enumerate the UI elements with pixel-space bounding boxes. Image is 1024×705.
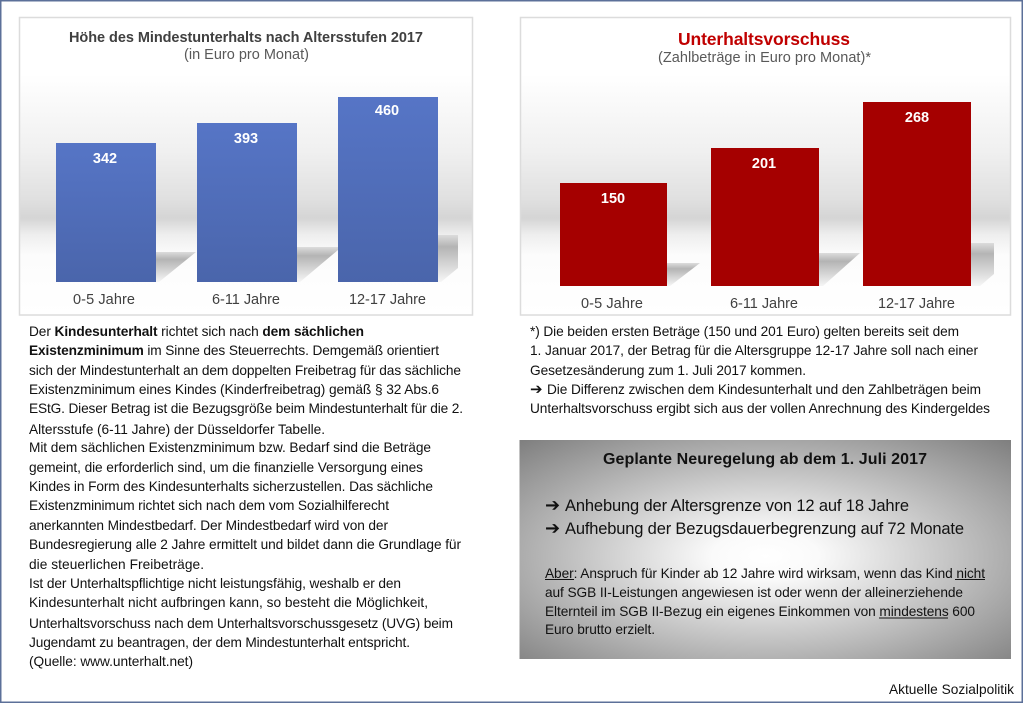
bar: 12-17 Jahre 268: [863, 102, 971, 286]
text block: Kindesunterhalt explanation: anerkannten Mindestbedarf. Der Mindestbedarf wird von der: [29, 518, 388, 533]
text block: Kindesunterhalt explanation: Mit dem sächlichen Existenzminimum bzw. Bedarf sind die Beträge: [29, 440, 431, 455]
text block: footnote: 1. Januar 2017, der Betrag für die Altersgruppe 12-17 Jahre soll nach einer: [530, 343, 978, 358]
axis labels: 6-11 Jahre: [212, 292, 280, 308]
chart subtitle: (Zahlbeträge in Euro pro Monat)*: [658, 50, 871, 66]
bar shadows: [156, 235, 458, 282]
chart title: Unterhaltsvorschuss: [678, 29, 850, 49]
axis labels: [73, 292, 426, 308]
text block: Kindesunterhalt explanation: Jugendamt zu beantragen, der dem Mindestunterhalt entspricht.: [29, 635, 410, 650]
chart title: Höhe des Mindestunterhalts nach Altersstufen 2017: [69, 30, 423, 46]
text block: Kindesunterhalt explanation: die steuerlichen Freibeträge.: [29, 557, 204, 572]
text block: Kindesunterhalt explanation: Ist der Unterhaltspflichtige nicht leistungsfähig, weshalb er den: [29, 576, 401, 591]
bar: 6-11 Jahre 201: 201: [752, 156, 776, 172]
chart background: [20, 18, 472, 315]
bar: 0-5 Jahre 342: 342: [93, 151, 117, 167]
text block: Kindesunterhalt explanation: Bundesregierung alle 2 Jahre ermittelt und bildet dann die Grundlage für: [29, 537, 461, 552]
text block: Kindesunterhalt explanation: EStG. Dieser Betrag ist die Bezugsgröße beim Mindestunterhalt für die 2.: [29, 401, 463, 416]
text block: Kindesunterhalt explanation: Unterhaltsvorschuss nach dem Unterhaltsvorschussgesetz (UVG) beim: [29, 616, 453, 631]
axis labels: 0-5 Jahre: [73, 292, 135, 308]
bar shadows: [667, 243, 994, 286]
text block: condition: Euro brutto erzielt.: [545, 622, 655, 637]
arrow: footnote: ➔: [530, 380, 543, 398]
text block: Kindesunterhalt explanation: gemeint, die erforderlich sind, um die finanzielle Versorgung eines: [29, 460, 423, 475]
panel: Unterhaltsvorschuss chart: [520, 18, 1010, 315]
axis labels: 0-5 Jahre: [581, 296, 643, 312]
text block: condition: auf SGB II-Leistungen angewiesen ist oder wenn der alleinerziehende: [545, 585, 963, 600]
bar: 12-17 Jahre 460: [338, 97, 438, 282]
text block: footnote: Unterhaltsvorschuss ergibt sich aus der vollen Anrechnung des Kindergeldes: [530, 401, 990, 416]
bar: 12-17 Jahre 268: 268: [905, 110, 929, 126]
item: Bezugsdauer: Aufhebung der Bezugsdauerbegrenzung auf 72 Monate: [565, 520, 964, 538]
panel background: [520, 440, 1011, 659]
text block: Kindesunterhalt explanation: Kindes in Form des Kindesunterhalts sicherzustellen. Das sächliche: [29, 479, 433, 494]
bar: 12-17 Jahre 460: 460: [375, 103, 399, 119]
arrow: second item: ➔: [545, 518, 560, 539]
bar: 6-11 Jahre 201: [711, 148, 819, 286]
item: Altersgrenze: Anhebung der Altersgrenze von 12 auf 18 Jahre: [565, 497, 909, 515]
text block: Kindesunterhalt explanation: (Quelle: www.unterhalt.net): [29, 654, 193, 669]
text block: Kindesunterhalt explanation: Der Kindesunterhalt richtet sich nach dem sächlichen: [29, 324, 364, 339]
bar: 6-11 Jahre 393: [197, 123, 297, 282]
axis labels: 12-17 Jahre: [349, 292, 426, 308]
text block: Kindesunterhalt explanation: Kindesunterhalt nicht aufbringen kann, so besteht die Möglichkeit,: [29, 595, 428, 610]
text block: Kindesunterhalt explanation: Existenzminimum richtet sich nach dem vom Sozialhilferecht: [29, 498, 389, 513]
panel heading: Geplante Neuregelung ab dem 1. Juli 2017: [603, 451, 927, 468]
text block: footnote: [530, 324, 990, 416]
bar: 0-5 Jahre 150: 150: [601, 191, 625, 207]
panel: Mindestunterhalt chart: [20, 18, 472, 315]
panel: Geplante Neuregelung: [520, 440, 1011, 659]
axis labels: 12-17 Jahre: [878, 296, 955, 312]
text block: condition: Aber: Anspruch für Kinder ab 12 Jahre wird wirksam, wenn das Kind nicht: [545, 566, 985, 581]
text block: Kindesunterhalt explanation: [29, 324, 463, 669]
bar: 0-5 Jahre 342: [56, 143, 156, 282]
chart subtitle: (in Euro pro Monat): [184, 47, 309, 63]
text block: Kindesunterhalt explanation: Altersstufe (6-11 Jahre) der Düsseldorfer Tabelle.: [29, 422, 325, 437]
text block: Kindesunterhalt explanation: Existenzminimum im Sinne des Steuerrechts. Demgemäß orientiert: [29, 343, 439, 358]
text block: condition: [545, 566, 985, 637]
chart background: [520, 18, 1010, 315]
text block: condition: Elternteil im SGB II-Bezug ein eigenes Einkommen von mindestens 600: [545, 604, 975, 619]
axis labels: [581, 296, 955, 312]
text block: footnote: Die Differenz zwischen dem Kindesunterhalt und den Zahlbeträgen beim: [547, 382, 981, 397]
axis labels: 6-11 Jahre: [730, 296, 798, 312]
text block: footnote: Gesetzesänderung zum 1. Juli 2017 kommen.: [530, 363, 806, 378]
bar: 6-11 Jahre 393: 393: [234, 131, 258, 147]
arrow: first item: ➔: [545, 495, 560, 516]
text block: Kindesunterhalt explanation: Existenzminimum eines Kindes (Kinderfreibetrag) gemäß § 32 Abs.6: [29, 382, 439, 397]
bar: 0-5 Jahre 150: [560, 183, 667, 286]
footer credit: Aktuelle Sozialpolitik: [889, 682, 1014, 697]
text block: footnote: *) Die beiden ersten Beträge (150 und 201 Euro) gelten bereits seit dem: [530, 324, 959, 339]
text block: Kindesunterhalt explanation: sich der Mindestunterhalt an dem doppelten Freibetrag für das sächliche: [29, 363, 461, 378]
